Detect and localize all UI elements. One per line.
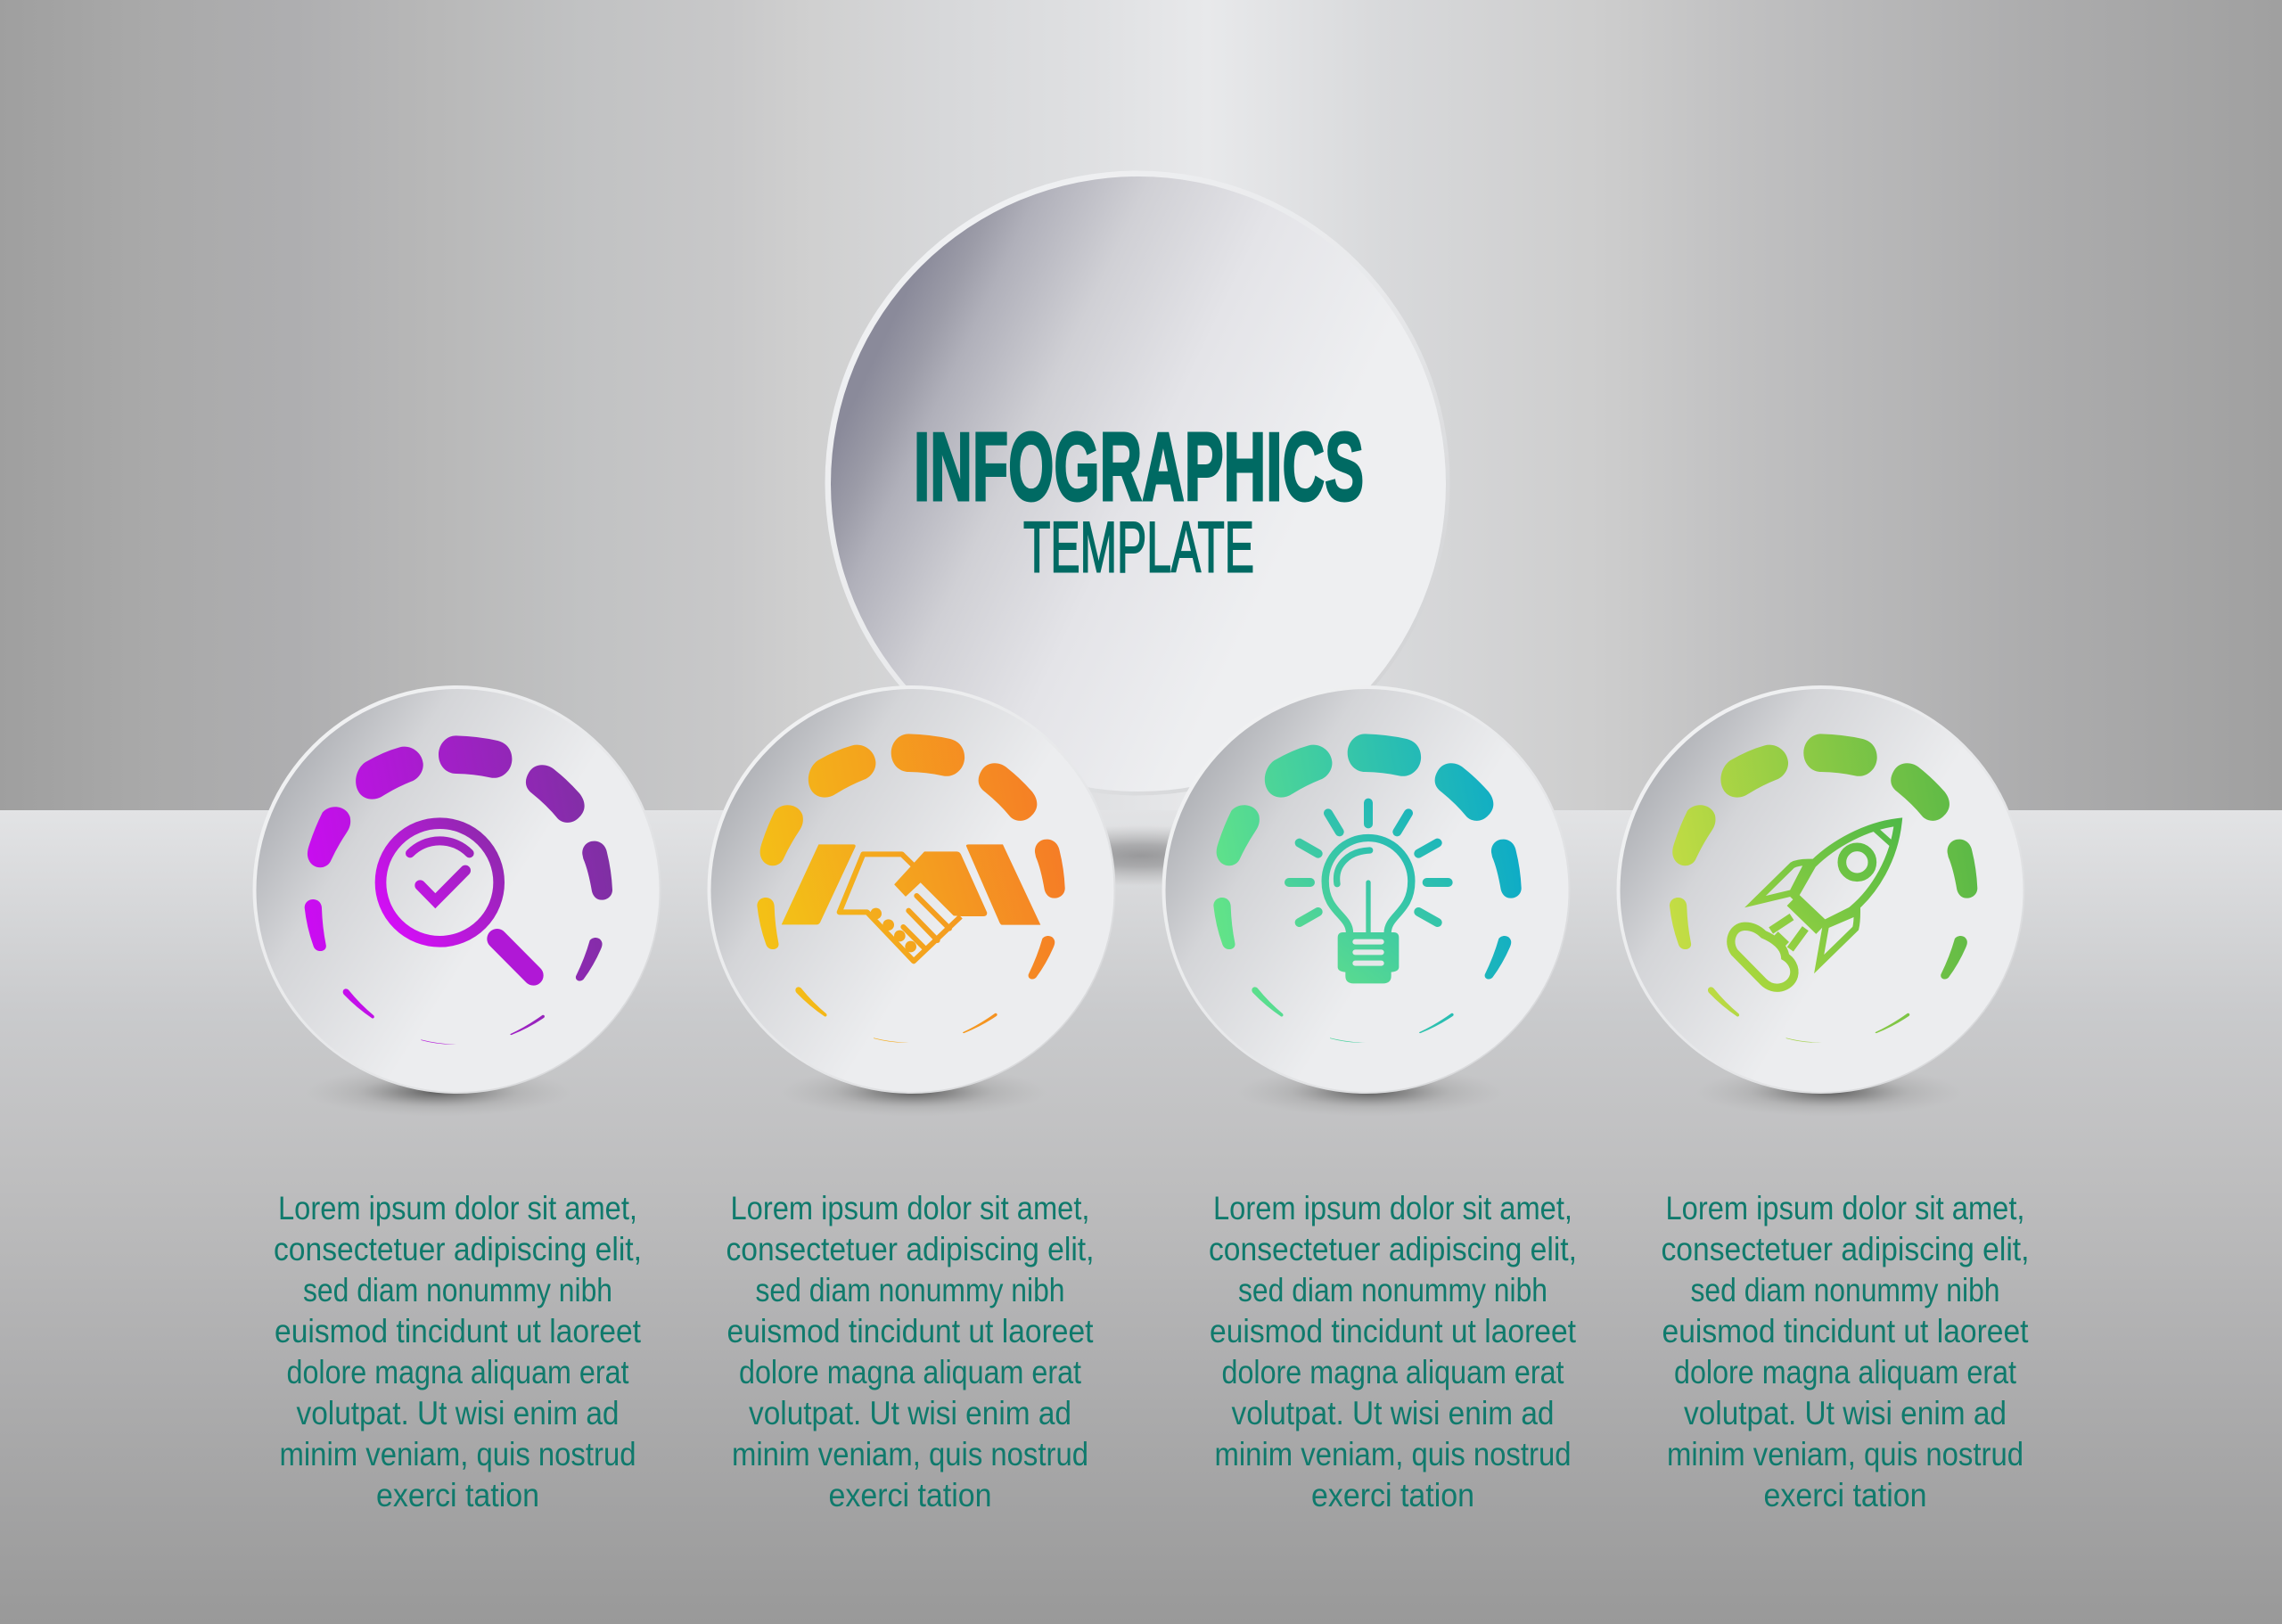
- text block: column 3: consectetuer adipiscing elit,: [1209, 1231, 1577, 1267]
- title: infographics: INFOGRAPHICS: [914, 413, 1364, 521]
- text block: column 4: sed diam nonummy nibh: [1690, 1272, 2000, 1308]
- text block: column 2: sed diam nonummy nibh: [756, 1272, 1064, 1308]
- text block: column 1: sed diam nonummy nibh: [303, 1272, 612, 1308]
- icon: handshake: [782, 844, 1040, 961]
- text block: column 1: euismod tincidunt ut laoreet: [275, 1313, 642, 1349]
- text block: column 1: volutpat. Ut wisi enim ad: [296, 1395, 619, 1431]
- text block: column 3: [1209, 1190, 1577, 1513]
- dashed ring: orange: [757, 734, 1065, 1043]
- panel: rocket circle: [1617, 685, 2025, 1094]
- panel: light bulb circle: [1162, 685, 1571, 1094]
- text block: column 4: volutpat. Ut wisi enim ad: [1684, 1395, 2007, 1431]
- text block: column 2: dolore magna aliquam erat: [739, 1354, 1082, 1390]
- shadow under circle 2: [780, 1067, 1047, 1117]
- icon: magnifier with check: [381, 824, 533, 975]
- text block: column 2: [726, 1190, 1095, 1513]
- text block: column 4: dolore magna aliquam erat: [1674, 1354, 2017, 1390]
- shadow under circle 3: [1236, 1067, 1504, 1117]
- text block: column 3: volutpat. Ut wisi enim ad: [1232, 1395, 1555, 1431]
- icon: light bulb: [1289, 803, 1449, 983]
- shadow under circle 1: [305, 1067, 572, 1117]
- text block: column 3: sed diam nonummy nibh: [1238, 1272, 1547, 1308]
- text block: column 1: Lorem ipsum dolor sit amet,: [278, 1190, 637, 1226]
- text block: column 1: minim veniam, quis nostrud: [280, 1436, 636, 1472]
- text block: column 4: exerci tation: [1763, 1477, 1927, 1513]
- text block: column 1: consectetuer adipiscing elit,: [274, 1231, 642, 1267]
- background floor: [0, 810, 2282, 1624]
- text block: column 2: minim veniam, quis nostrud: [732, 1436, 1088, 1472]
- text block: column 1: dolore magna aliquam erat: [287, 1354, 629, 1390]
- text block: column 1: exerci tation: [376, 1477, 539, 1513]
- text block: column 2: Lorem ipsum dolor sit amet,: [731, 1190, 1089, 1226]
- shadow under central circle: [989, 825, 1293, 886]
- text block: column 3: dolore magna aliquam erat: [1221, 1354, 1564, 1390]
- shadow under circle 4: [1695, 1067, 1963, 1117]
- text block: column 4: [1662, 1190, 2029, 1513]
- text block: column 2: exerci tation: [829, 1477, 991, 1513]
- dashed ring: teal: [1213, 734, 1522, 1043]
- text block: column 1: [274, 1190, 642, 1513]
- background wall: [0, 0, 2282, 810]
- text block: column 2: euismod tincidunt ut laoreet: [727, 1313, 1094, 1349]
- text block: column 4: euismod tincidunt ut laoreet: [1662, 1313, 2029, 1349]
- text block: column 3: minim veniam, quis nostrud: [1214, 1436, 1571, 1472]
- text block: column 3: exerci tation: [1311, 1477, 1474, 1513]
- text block: column 3: Lorem ipsum dolor sit amet,: [1213, 1190, 1572, 1226]
- icon: rocket: [1731, 822, 1898, 988]
- text block: column 4: Lorem ipsum dolor sit amet,: [1665, 1190, 2025, 1226]
- panel: handshake circle: [708, 685, 1116, 1094]
- text block: column 2: consectetuer adipiscing elit,: [726, 1231, 1095, 1267]
- text block: column 4: minim veniam, quis nostrud: [1667, 1436, 2023, 1472]
- subtitle: template: TEMPLATE: [1023, 508, 1254, 588]
- text block: column 4: consectetuer adipiscing elit,: [1662, 1231, 2029, 1267]
- text block: column 3: euismod tincidunt ut laoreet: [1210, 1313, 1577, 1349]
- text block: column 2: volutpat. Ut wisi enim ad: [749, 1395, 1071, 1431]
- dashed ring: purple: [305, 735, 612, 1045]
- panel: magnifier circle: [253, 685, 661, 1094]
- panel: central title circle: [825, 171, 1449, 795]
- dashed ring: green: [1670, 734, 1977, 1043]
